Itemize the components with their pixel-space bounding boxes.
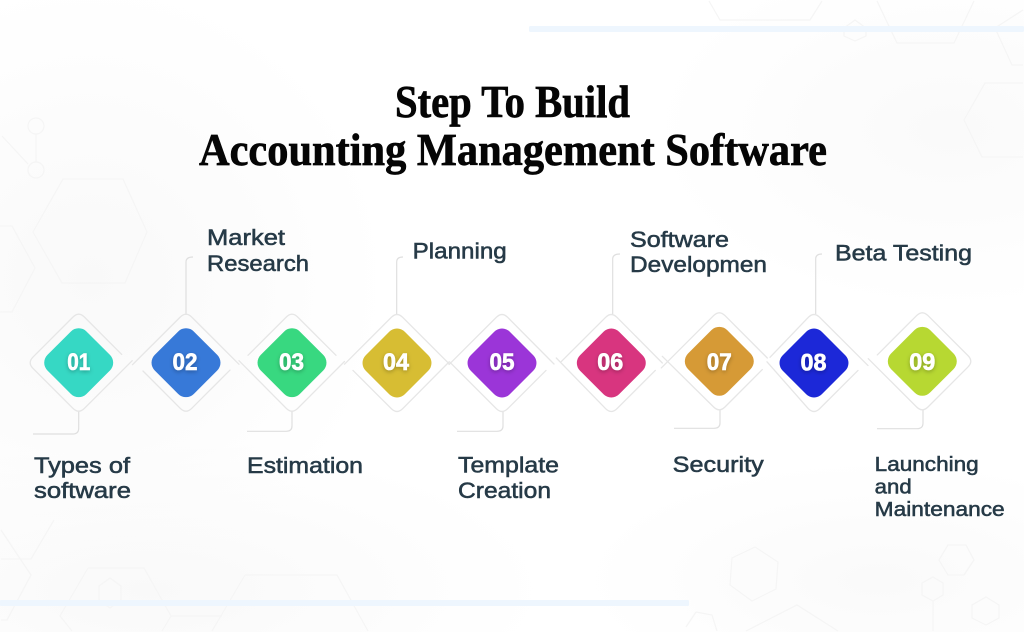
label: Types of software bbox=[34, 453, 131, 503]
step 07 bbox=[661, 313, 767, 410]
title: Accounting Management Software bbox=[199, 124, 827, 175]
step 02 bbox=[132, 314, 239, 411]
step 09 bbox=[868, 313, 971, 410]
step 04 bbox=[344, 314, 450, 412]
step 05: 05 bbox=[490, 349, 514, 376]
step 07: 07 bbox=[707, 349, 732, 376]
label: Software Developmen: Software bbox=[630, 227, 729, 252]
label: Launching and Maintenance bbox=[875, 453, 1005, 521]
label: Launching and Maintenance: Launching bbox=[875, 453, 979, 476]
step 08: 08 bbox=[800, 350, 826, 376]
step 03 bbox=[239, 314, 344, 411]
step 04: 04 bbox=[383, 349, 410, 376]
step 06: 06 bbox=[597, 349, 623, 376]
label: Beta Testing: Beta Testing bbox=[835, 241, 972, 266]
decorative bar: bottom bbox=[0, 600, 689, 606]
label: Types of software: software bbox=[34, 478, 131, 503]
label: Market Research bbox=[207, 225, 309, 276]
label: Planning: Planning bbox=[413, 238, 507, 263]
title: Step To Build bbox=[395, 76, 630, 127]
label: Template Creation: Template bbox=[458, 452, 559, 478]
label: Software Developmen: Developmen bbox=[630, 252, 767, 277]
label: Template Creation: Creation bbox=[458, 478, 551, 503]
title bbox=[199, 76, 827, 175]
label: Market Research: Market bbox=[207, 225, 286, 250]
decorative bar: top bbox=[529, 26, 1024, 32]
label: Launching and Maintenance: and bbox=[875, 476, 912, 498]
label: Estimation: Estimation bbox=[247, 453, 363, 478]
connector lines bbox=[33, 254, 923, 434]
step 08 bbox=[767, 314, 868, 412]
step 01 bbox=[30, 314, 132, 411]
label: Market Research: Research bbox=[207, 251, 309, 276]
label: Security: Security bbox=[673, 452, 765, 477]
step 06 bbox=[556, 314, 662, 412]
step 03: 03 bbox=[279, 349, 304, 376]
step 05 bbox=[449, 314, 554, 412]
label: Launching and Maintenance: Maintenance bbox=[875, 498, 1005, 521]
step 02: 02 bbox=[172, 349, 198, 376]
label: Template Creation bbox=[458, 452, 559, 503]
step 01: 01 bbox=[67, 349, 90, 376]
label: Software Developmen bbox=[630, 227, 767, 277]
step 09: 09 bbox=[909, 349, 935, 376]
label: Types of software: Types of bbox=[34, 453, 131, 478]
